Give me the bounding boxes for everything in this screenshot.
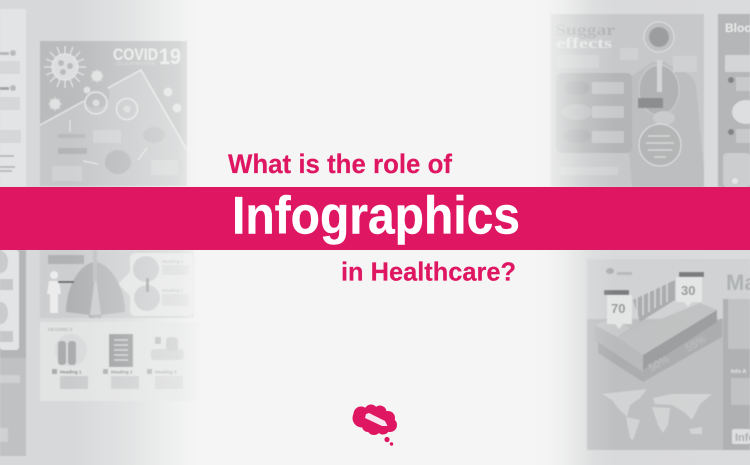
icon: doctors xyxy=(55,334,87,366)
panel: heading 3 illustrations: Heading 2 xyxy=(111,370,133,374)
icon: stomach xyxy=(653,111,675,125)
icon: cell rings xyxy=(85,92,138,120)
panel: heading 3 illustrations: HEADING 3 xyxy=(48,327,73,332)
labels xyxy=(52,369,57,374)
panel: lungs infographic xyxy=(40,250,194,319)
panel: Suggar effects infographic xyxy=(551,14,704,187)
callout xyxy=(638,98,663,108)
world map xyxy=(602,389,712,440)
labels: Heading 1 xyxy=(162,259,184,264)
heading: COVID19: COVID xyxy=(113,45,158,64)
panel: left edge infographic, top xyxy=(0,9,26,187)
panel: map infographic xyxy=(587,259,750,450)
callout: 30 xyxy=(676,272,704,307)
isometric block xyxy=(598,318,722,382)
callout: 30: 30 xyxy=(681,283,695,298)
icon: intestines xyxy=(639,124,681,166)
icon: x-ray xyxy=(109,334,133,367)
left fade overlay xyxy=(70,0,205,465)
right sample infographics xyxy=(551,14,750,450)
panel: left edge infographic, bottom xyxy=(0,250,26,456)
text blocks xyxy=(557,55,599,68)
button: Info xyxy=(732,429,750,444)
heading: Suggar effects: Suggar xyxy=(555,22,615,39)
title line 1: What is the role of xyxy=(228,149,453,179)
body silhouette xyxy=(626,62,704,187)
label: Info A: Info A xyxy=(731,369,746,375)
panel: COVID 19 infographic: CELLULAR INFECTION xyxy=(115,61,155,66)
panel: COVID 19 infographic xyxy=(40,41,187,186)
panel: Suggar effects infographic: effects xyxy=(556,36,612,52)
icon: large virus xyxy=(44,46,86,88)
panel: lungs infographic: NOTE xyxy=(89,314,102,319)
panel: heading 3 illustrations: Heading 3 xyxy=(155,370,177,374)
logo mark xyxy=(606,268,614,274)
callout: 70: 70 xyxy=(611,301,625,316)
right fade overlay xyxy=(530,0,615,465)
icon: hospital bed xyxy=(151,349,184,360)
panel: COVID 19 infographic: 19 xyxy=(159,44,181,69)
title line 3: in Healthcare? xyxy=(341,256,516,286)
text blocks xyxy=(52,130,178,181)
dark organ panel xyxy=(556,73,632,153)
panel: heading 3 illustrations xyxy=(40,322,199,401)
panel: lungs infographic: Heading 1 xyxy=(162,288,184,293)
callout: 70 xyxy=(604,290,632,329)
icon: lungs xyxy=(66,262,94,315)
percentages: 50% xyxy=(646,353,672,375)
panel: heading 3 illustrations: Heading 1 xyxy=(60,370,82,374)
panel: map infographic: 55% xyxy=(684,333,709,355)
left sample infographics xyxy=(0,9,199,456)
icon: human figure xyxy=(47,271,61,313)
panel: Blood infographic xyxy=(718,14,750,187)
icon: brain circle xyxy=(644,22,674,52)
icon: alveoli xyxy=(133,256,159,282)
icon: lungs xyxy=(639,65,679,115)
title main word: Infographics xyxy=(232,186,520,246)
pink banner xyxy=(0,187,750,250)
icon: smaller virus particles xyxy=(48,69,181,112)
icon: brain logo xyxy=(352,404,397,446)
